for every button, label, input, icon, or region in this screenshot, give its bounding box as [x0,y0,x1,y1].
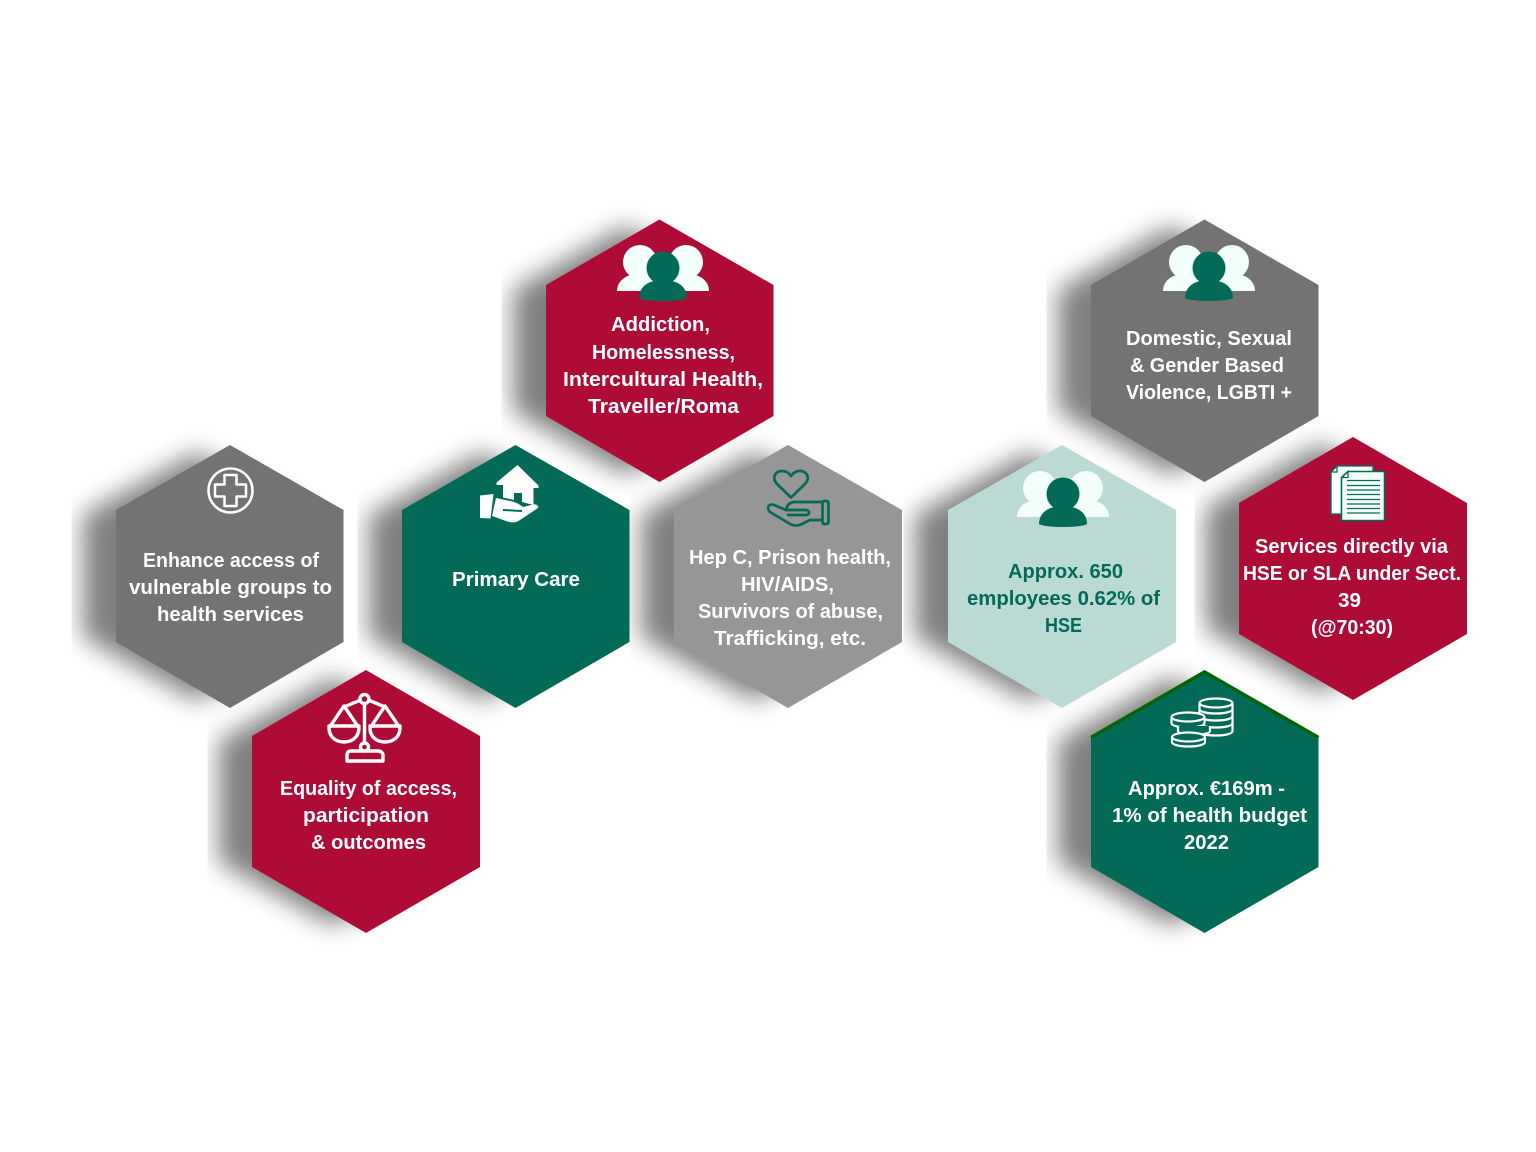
panel: employees [948,445,1176,708]
icon: medical cross [208,468,252,512]
icon: people group [1163,245,1255,301]
text: addiction and homelessness: Intercultural Health, [563,369,763,391]
text: enhance access: Enhance access of [143,550,319,572]
icon: people group [617,245,709,301]
text: enhance access: health services [157,604,304,626]
text: services: Services directly via [1255,536,1449,558]
text: hep c and prison health: Trafficking, etc. [714,628,866,650]
text: domestic violence [1126,328,1292,404]
text: equality: Equality of access, [280,778,457,800]
text: enhance access [129,550,332,626]
panel: budget [1091,670,1318,933]
icon: documents [1331,466,1384,520]
text: employees: HSE [1045,615,1082,637]
icon: coins [1172,698,1232,746]
icon: people group [1017,471,1109,527]
text: services: HSE or SLA under Sect. [1243,563,1461,585]
text: budget: Approx. €169m - [1128,778,1285,800]
icon: scales [329,694,400,761]
text: domestic violence: Domestic, Sexual [1126,328,1292,350]
panel: enhance access [116,445,344,708]
text: hep c and prison health [689,547,891,650]
text: addiction and homelessness: Traveller/Roma [588,396,740,418]
text: equality [280,778,457,854]
panel: domestic violence [1091,220,1318,482]
text: enhance access: vulnerable groups to [129,577,332,599]
text: employees: employees 0.62% of [967,588,1160,610]
text: budget: 2022 [1184,832,1229,854]
text: equality: participation [303,805,429,827]
text: services: (@70:30) [1311,617,1393,639]
panel: hep c and prison health [674,445,902,708]
text: domestic violence: & Gender Based [1130,355,1284,377]
text: budget [1112,778,1307,854]
text: hep c and prison health: HIV/AIDS, [741,574,834,596]
hexagon drop shadows [83,226,1434,926]
icon: house in hand [480,465,538,522]
text: domestic violence: Violence, LGBTI + [1126,382,1292,404]
panel: equality [252,670,480,933]
text: primary care: Primary Care [452,569,580,591]
text: hep c and prison health: Hep C, Prison health, [689,547,891,569]
text: services [1243,536,1461,639]
icon: heart in hand [768,471,828,526]
text: employees [967,561,1160,637]
text: addiction and homelessness: Addiction, [611,314,710,336]
panel: services [1239,437,1467,700]
text: addiction and homelessness: Homelessness, [592,342,735,364]
text: hep c and prison health: Survivors of abuse, [698,601,883,623]
text: addiction and homelessness [563,314,763,418]
text: employees: Approx. 650 [1008,561,1123,583]
text: services: 39 [1338,590,1361,612]
text: budget: 1% of health budget [1112,805,1307,827]
text: equality: & outcomes [311,832,426,854]
panel: primary care [402,445,630,708]
panel: addiction and homelessness [546,220,774,482]
